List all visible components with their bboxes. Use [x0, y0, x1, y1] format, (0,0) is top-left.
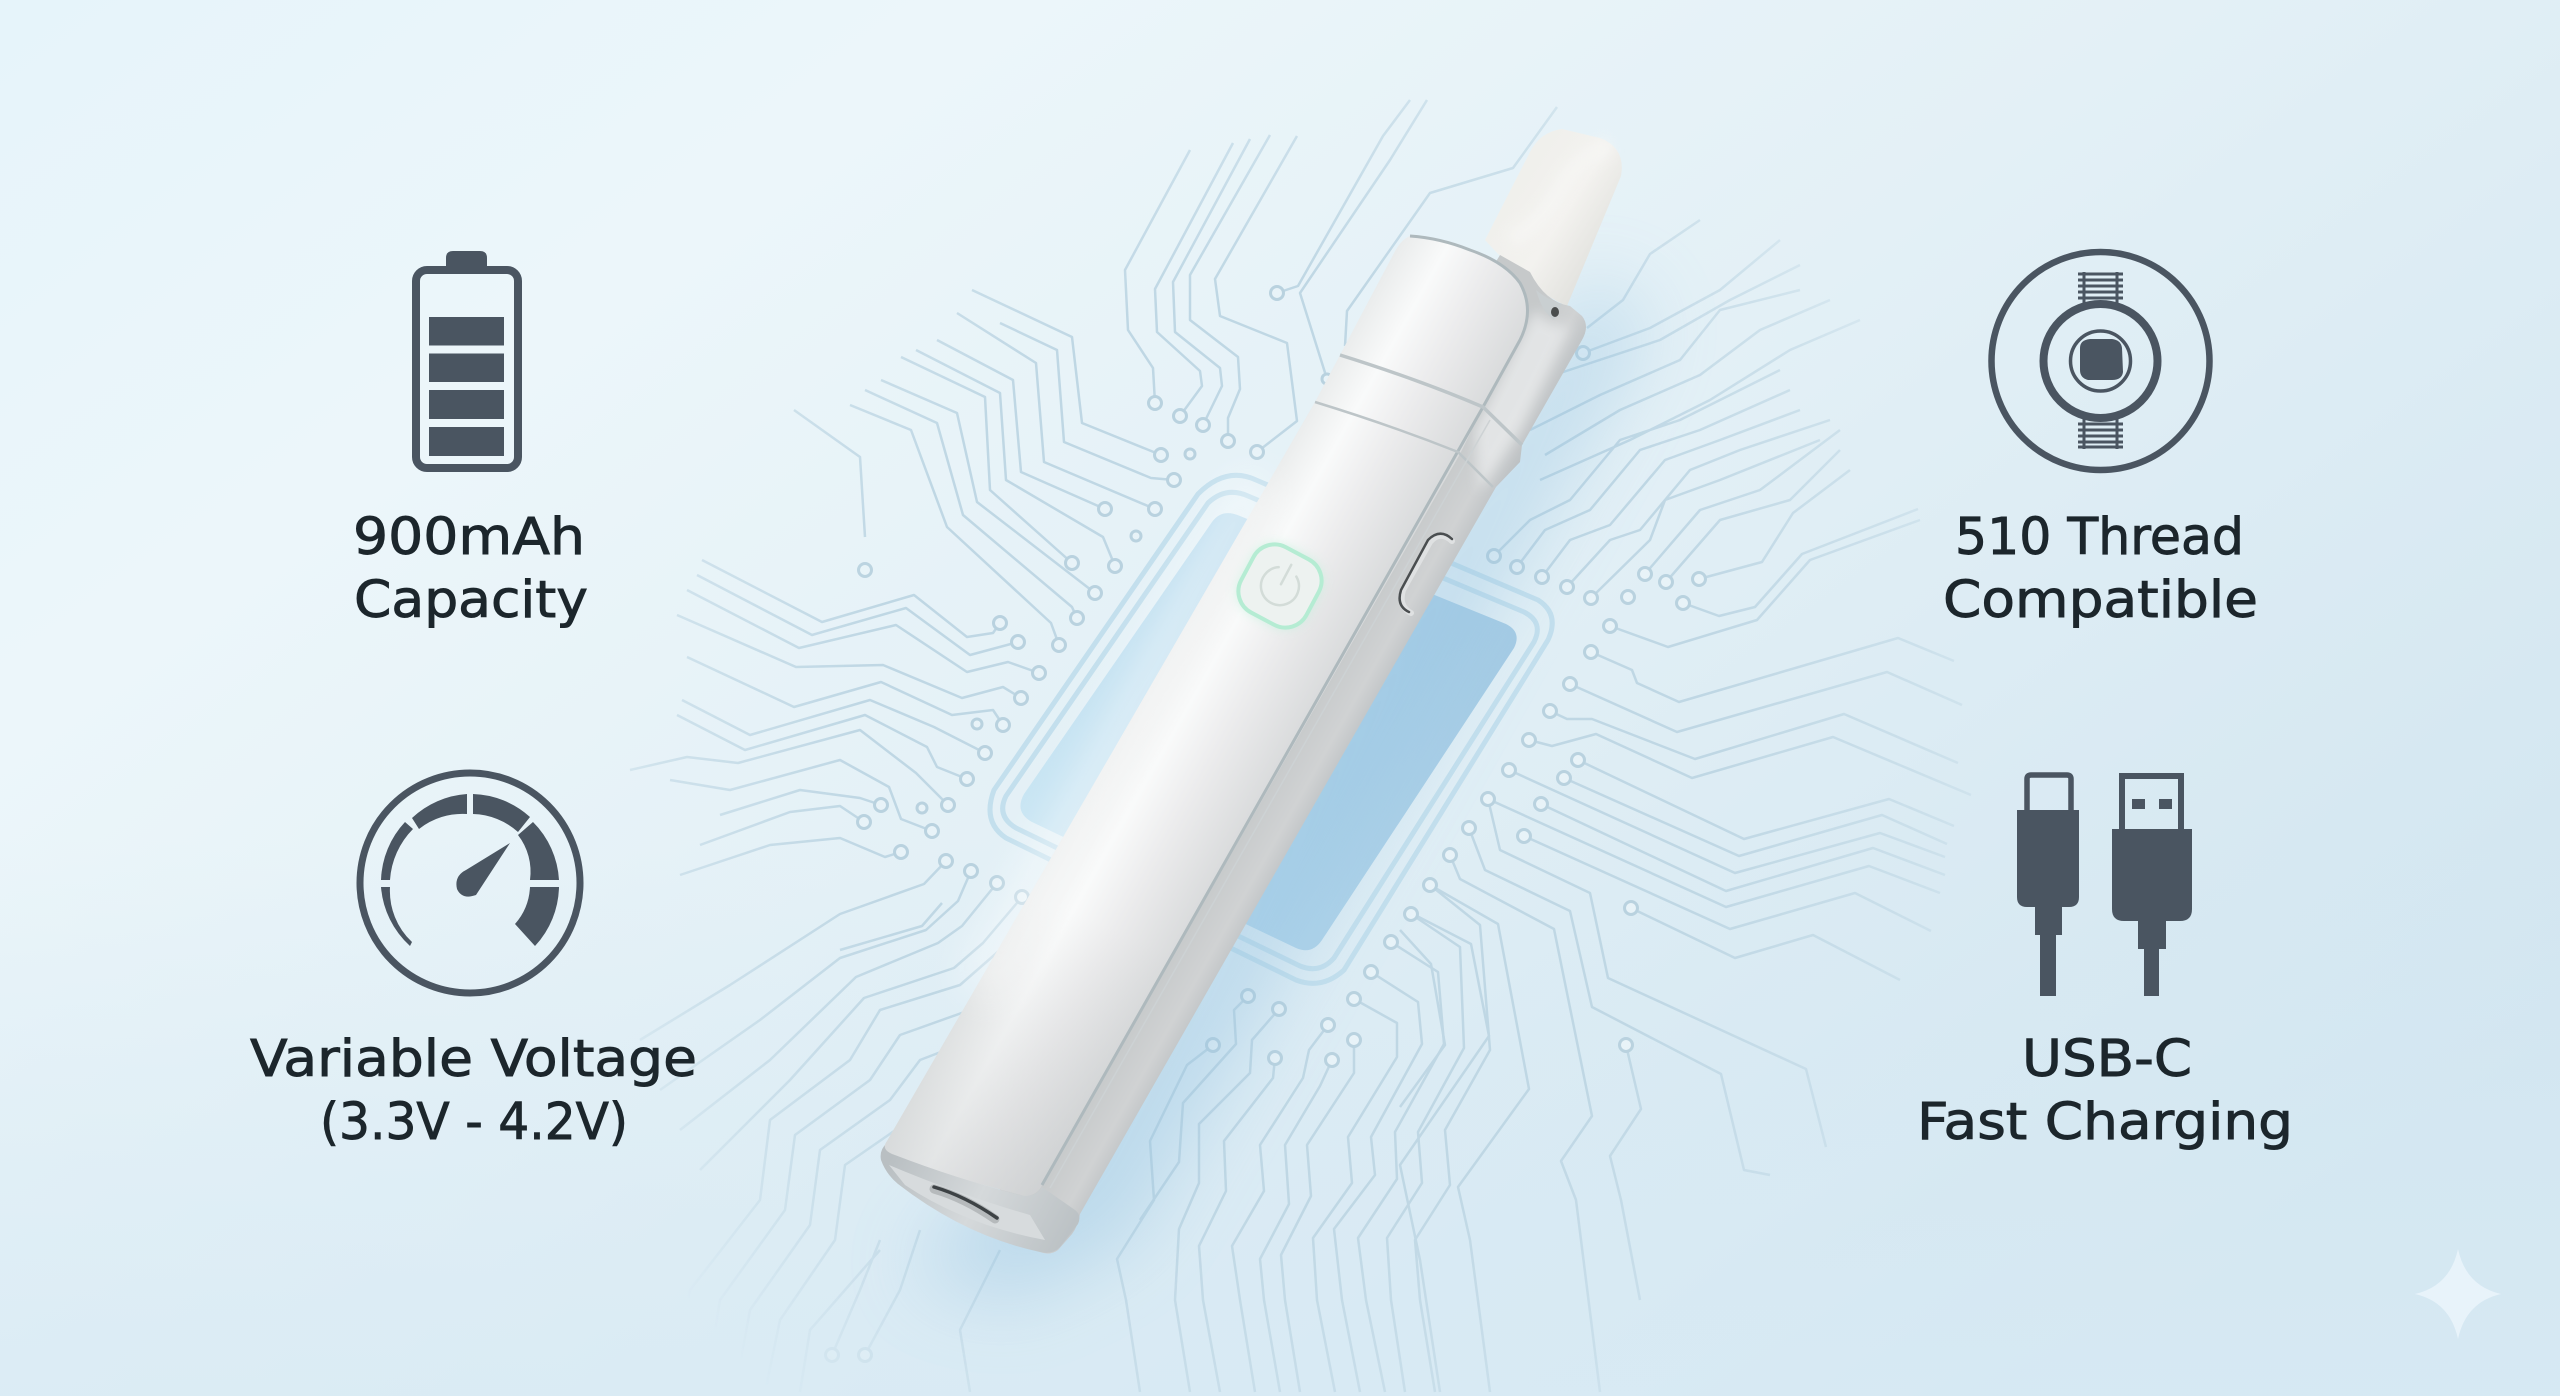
icon: usb-a plug [2112, 776, 2192, 996]
traces: upper-left cluster [794, 290, 1174, 645]
icon: sparkle watermark [2415, 1249, 2501, 1339]
text: 510 Thread Compatible [1943, 508, 2258, 630]
traces: top cluster [1125, 100, 1557, 452]
traces: left cluster [630, 560, 1039, 875]
top thread [2078, 272, 2123, 304]
traces: bottom cluster [1117, 885, 1490, 1392]
icon: thread connector [1992, 252, 2210, 470]
text: 510 Thread Compatible: Compatible [1943, 571, 2258, 630]
text: USB-C Fast Charging: Fast Charging [1917, 1093, 2293, 1152]
bottom thread [2078, 418, 2123, 449]
icon: gauge [360, 773, 580, 993]
chip fill [1020, 513, 1517, 950]
front panel [885, 236, 1528, 1196]
feature: 510 thread [1943, 252, 2258, 630]
traces: lower-right cluster [1400, 799, 1826, 1392]
power icon [1254, 556, 1308, 612]
air inlet [1536, 290, 1562, 320]
feature: variable voltage [250, 773, 697, 1152]
usb port [934, 1187, 997, 1219]
text: USB-C Fast Charging [1917, 1030, 2293, 1152]
text: 900mAh Capacity [353, 508, 588, 630]
side button [1400, 534, 1452, 613]
traces: right cluster [1488, 470, 1971, 980]
text: 900mAh Capacity: 900mAh [353, 508, 585, 567]
mouthpiece [1485, 129, 1622, 306]
power button [1230, 536, 1330, 636]
circuit board traces [630, 100, 1971, 1392]
device [881, 129, 1622, 1254]
feature: usb-c fast charging [1917, 775, 2293, 1152]
icon: usb-c plug [2017, 775, 2079, 996]
central chip outline [990, 475, 1552, 983]
feature: battery capacity [353, 251, 588, 630]
gauge needle [456, 843, 510, 897]
text: Variable Voltage (3.3V - 4.2V): Variable Voltage [250, 1030, 697, 1089]
device shadow [910, 280, 1650, 1300]
text: Variable Voltage (3.3V - 4.2V) [250, 1030, 697, 1152]
text: Variable Voltage (3.3V - 4.2V): (3.3V - 4.2V) [320, 1093, 628, 1152]
bottom face [881, 1143, 1079, 1253]
text: 900mAh Capacity: Capacity [354, 571, 588, 630]
bottom rim inner [889, 1165, 1045, 1240]
text: USB-C Fast Charging: USB-C [2022, 1030, 2192, 1089]
metal side [1000, 255, 1586, 1254]
metal top highlight [1475, 310, 1570, 490]
chip traces [990, 475, 1552, 983]
icon: battery [416, 251, 518, 468]
panel edge lines [1042, 236, 1528, 1188]
pads [826, 286, 1706, 1362]
traces: upper-right cluster [1494, 220, 1860, 598]
traces: lower-left cluster [640, 861, 1045, 1392]
text: 510 Thread Compatible: 510 Thread [1955, 508, 2244, 567]
panel highlight [960, 470, 1275, 1000]
